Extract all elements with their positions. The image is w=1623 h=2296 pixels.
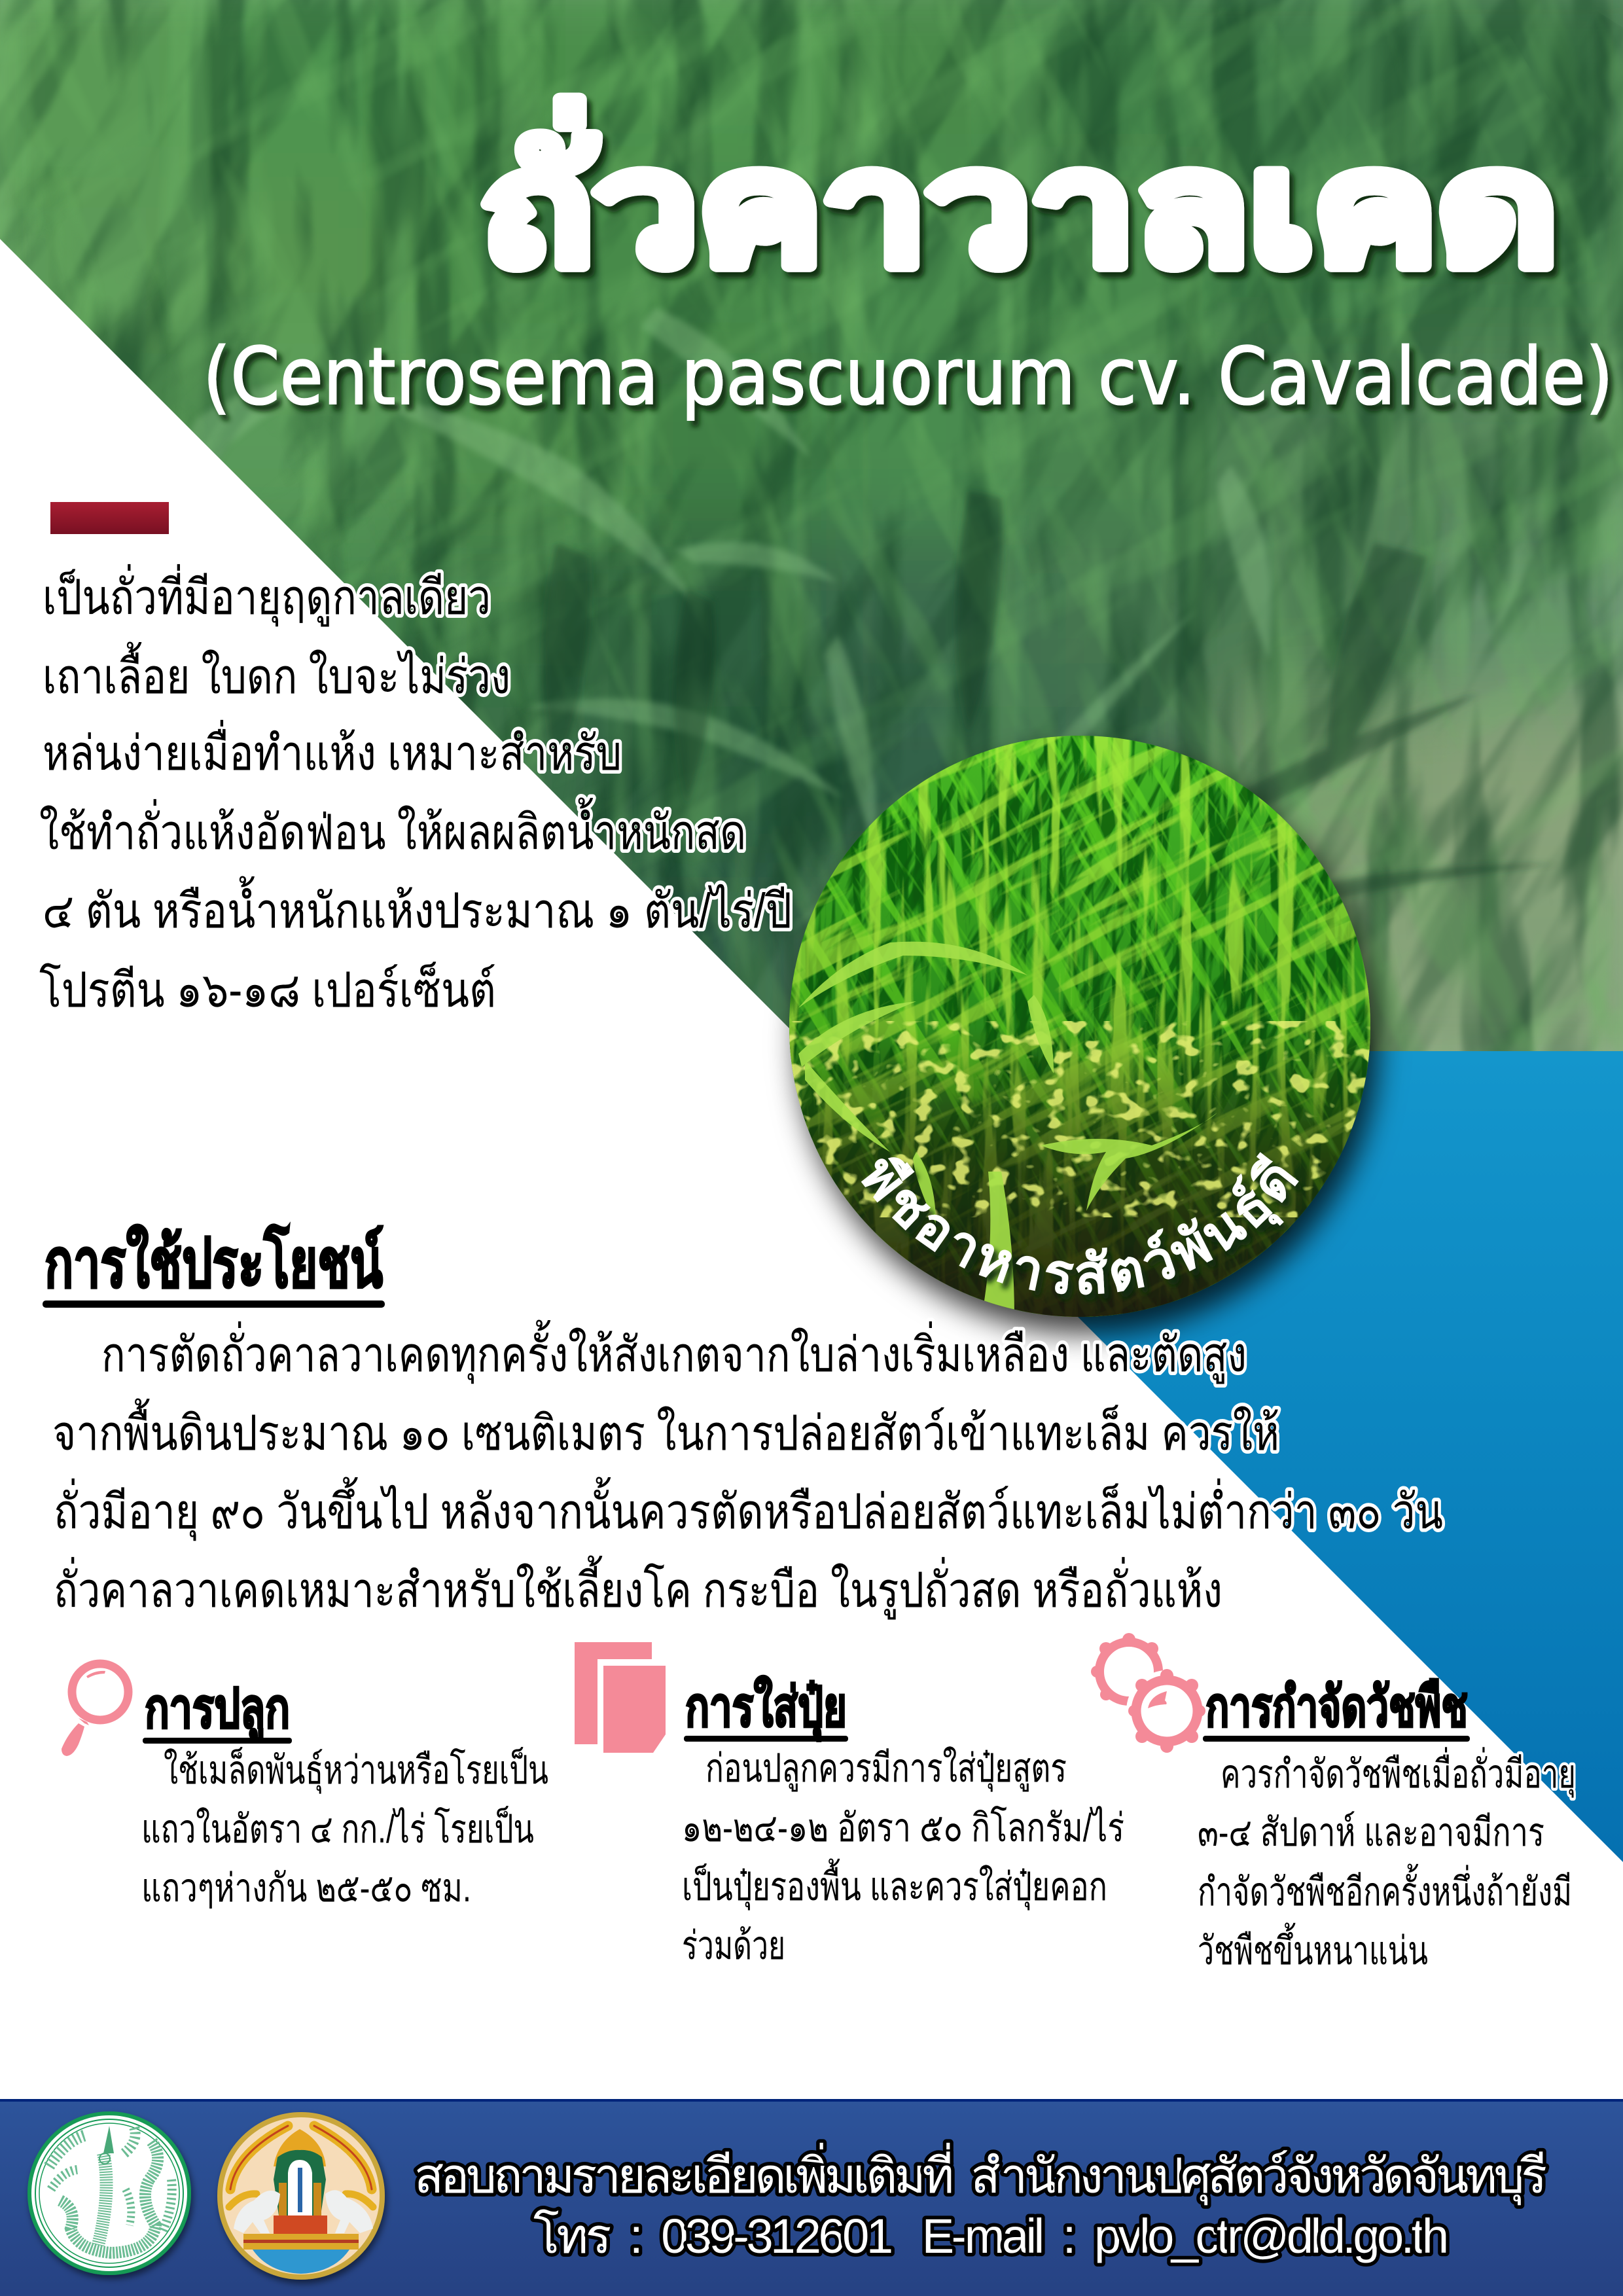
benefits paragraph: ถั่วคาลวาเคดเหมาะสำหรับใช้เลี้ยงโค กระบือ ในรูปถั่วสด หรือถั่วแห้ง	[54, 1555, 1222, 1620]
intro description text: เถาเลื้อย ใบดก ใบจะไม่ร่วง	[43, 641, 510, 704]
intro description text	[39, 564, 792, 1017]
icon: magnifier	[62, 1664, 128, 1756]
broad grass blades	[190, 308, 1274, 923]
fertilizer text	[682, 1746, 1124, 1967]
weed control text: วัชพืชขึ้นหนาแน่น	[1198, 1922, 1428, 1973]
intro description text: เป็นถั่วที่มีอายุฤดูกาลเดียว	[43, 564, 491, 627]
section heading: benefits	[43, 1224, 385, 1308]
weed control heading: การกำจัดวัชพืช	[1205, 1676, 1468, 1738]
circular grass photo with curved label	[493, 435, 1623, 1597]
fertilizer text: ๑๒-๒๔-๑๒ อัตรา ๕๐ กิโลกรัม/ไร่	[682, 1805, 1124, 1850]
planting text: ใช้เมล็ดพันธุ์หว่านหรือโรยเป็น	[164, 1747, 548, 1794]
planting text: แถวๆห่างกัน ๒๕-๕๐ ซม.	[141, 1866, 471, 1910]
fertilizer heading: การใส่ปุ๋ย	[685, 1676, 847, 1742]
icon: gears	[1091, 1633, 1207, 1753]
intro description text: ๔ ตัน หรือน้ำหนักแห้งประมาณ ๑ ตัน/ไร่/ปี	[43, 876, 792, 938]
curved text label: พืชอาหารสัตว์พันธุ์ดี	[861, 1152, 1306, 1302]
grass texture streaks	[0, 0, 1623, 1051]
planting heading: การปลูก	[145, 1677, 290, 1743]
benefits paragraph: การตัดถั่วคาลวาเคดทุกครั้งให้สังเกตจากใบล่างเริ่มเหลือง และตัดสูง	[101, 1319, 1247, 1384]
column: planting	[62, 1664, 548, 1910]
footer contact text: โทร : 039-312601 E-mail : pvlo_ctr@dld.go.th	[533, 2209, 1449, 2263]
dark broad blades	[440, 491, 1558, 923]
footer band	[0, 2099, 1623, 2296]
benefits paragraph	[52, 1319, 1443, 1620]
background photo: grass field	[0, 0, 1623, 1051]
title: ถั่วคาวาลเคด	[481, 99, 1558, 296]
blue diagonal panel	[812, 1051, 1623, 1862]
planting text: แถวในอัตรา ๔ กก./ไร่ โรยเป็น	[141, 1806, 534, 1851]
seal: gold livestock department emblem	[220, 2115, 382, 2277]
intro description text: โปรตีน ๑๖-๑๘ เปอร์เซ็นต์	[39, 962, 496, 1017]
fertilizer text: ร่วมด้วย	[682, 1924, 785, 1967]
seal: green naga emblem	[29, 2113, 189, 2273]
section heading: benefits: การใช้ประโยชน์	[45, 1224, 383, 1302]
weed control text	[1198, 1747, 1576, 1973]
intro description text: หล่นง่ายเมื่อทำแห้ง เหมาะสำหรับ	[43, 719, 622, 780]
icon: stacked pages	[575, 1642, 666, 1753]
fertilizer heading	[684, 1676, 848, 1742]
photo disc	[493, 435, 1623, 1597]
weed control heading	[1203, 1676, 1470, 1742]
maroon accent bar	[50, 502, 169, 534]
column: weed control	[1091, 1633, 1576, 1973]
footer contact text	[414, 2142, 1547, 2263]
benefits paragraph: จากพื้นดินประมาณ ๑๐ เซนติเมตร ในการปล่อยสัตว์เข้าแทะเล็ม ควรให้	[52, 1398, 1279, 1460]
footer contact text: สอบถามรายละเอียดเพิ่มเติมที่ สำนักงานปศุสัตว์จังหวัดจันทบุรี	[414, 2142, 1547, 2206]
fertilizer text: เป็นปุ๋ยรองพื้น และควรใส่ปุ๋ยคอก	[682, 1858, 1107, 1910]
column: fertilizer	[575, 1642, 1124, 1967]
fertilizer text: ก่อนปลูกควรมีการใส่ปุ๋ยสูตร	[705, 1746, 1067, 1792]
intro description text: ใช้ทำถั่วแห้งอัดฟ่อน ให้ผลผลิตน้ำหนักสด	[39, 797, 746, 859]
planting text	[141, 1747, 548, 1910]
